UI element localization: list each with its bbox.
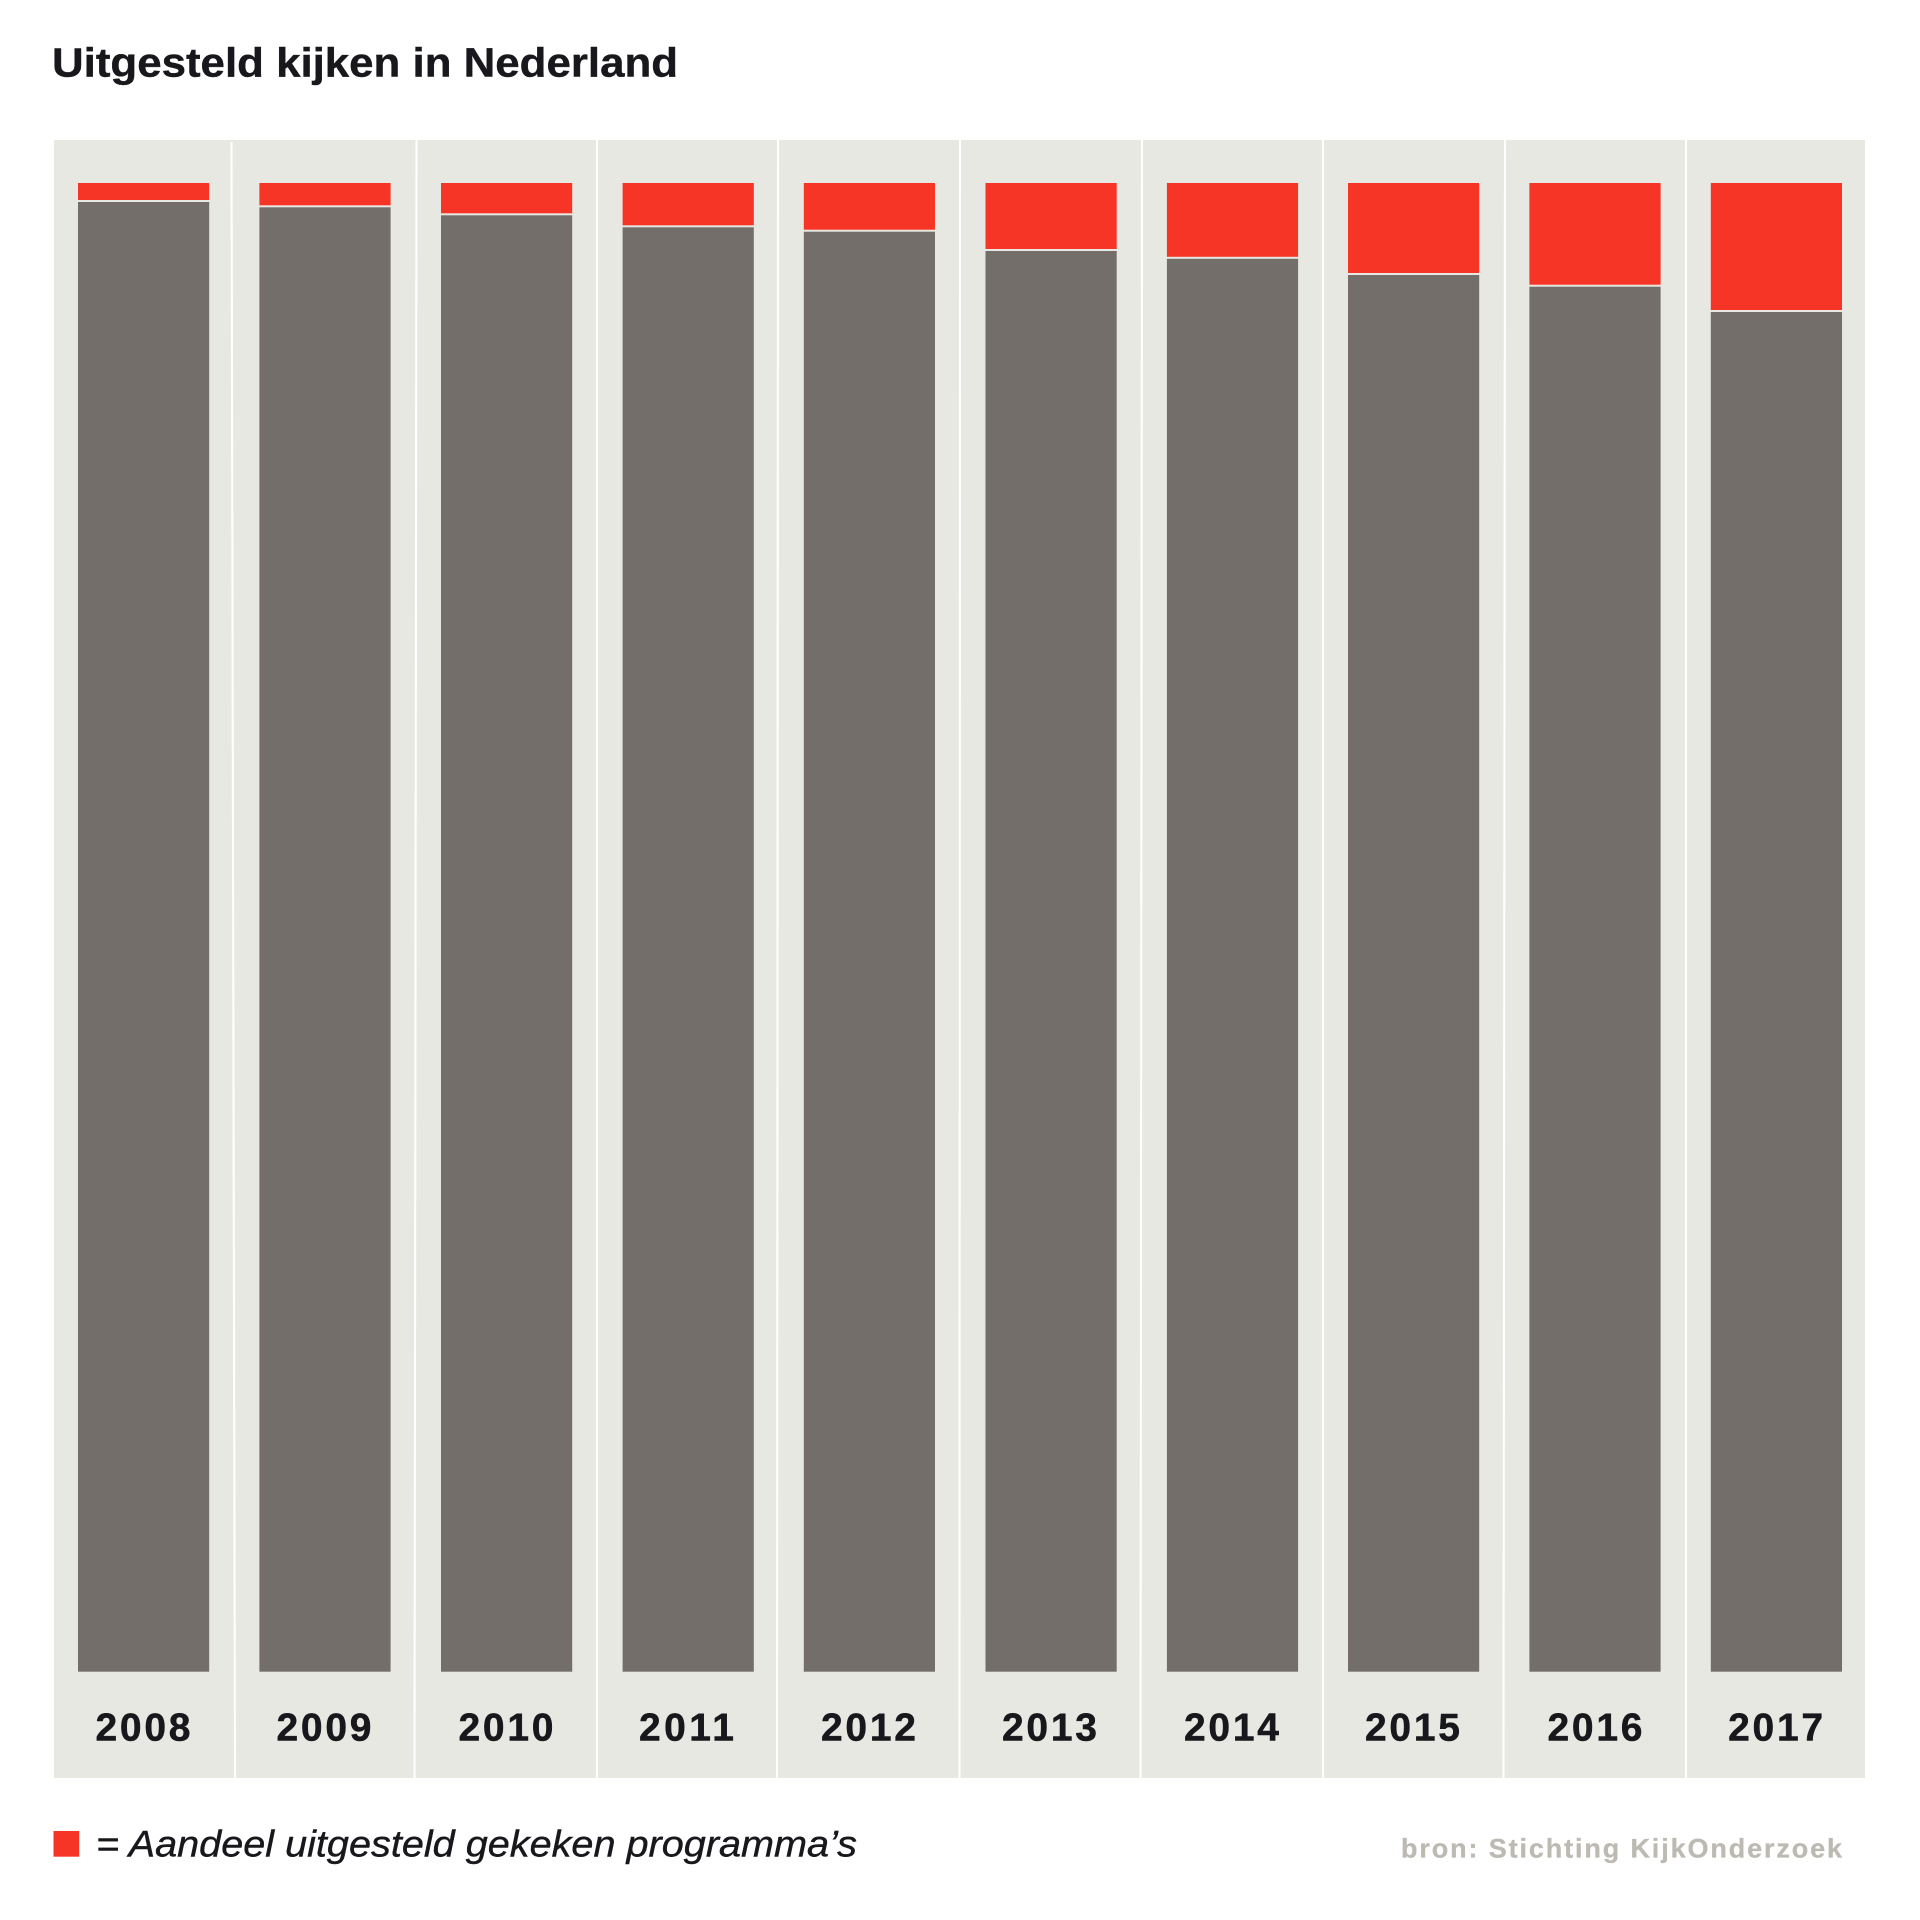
bar 2008 bbox=[78, 183, 209, 1750]
bar 2010 bbox=[441, 183, 572, 1750]
bar 2017: 2017 bbox=[1728, 1707, 1823, 1750]
legend text: = Aandeel uitgesteld gekeken programma’s bbox=[96, 1824, 857, 1865]
bar 2011: 2011 bbox=[639, 1707, 734, 1750]
bar 2017 bbox=[1711, 183, 1842, 1750]
bar 2013: 2013 bbox=[1002, 1707, 1097, 1750]
source credit: bron: Stichting KijkOnderzoek bbox=[1401, 1833, 1843, 1863]
bar 2012: 2012 bbox=[821, 1707, 916, 1750]
bar 2016: 2016 bbox=[1548, 1707, 1642, 1750]
bar 2015 bbox=[1348, 183, 1479, 1750]
bar 2015: 2015 bbox=[1365, 1707, 1460, 1750]
legend bbox=[54, 1824, 857, 1865]
bar 2008: 2008 bbox=[96, 1707, 190, 1750]
bar 2013 bbox=[986, 183, 1117, 1750]
legend swatch bbox=[54, 1831, 79, 1857]
bar 2011 bbox=[623, 183, 754, 1750]
bar 2012 bbox=[804, 183, 935, 1750]
bar 2014 bbox=[1167, 183, 1298, 1750]
bar 2009 bbox=[259, 183, 391, 1750]
title: Uitgesteld kijken in Nederland bbox=[52, 40, 678, 86]
bar 2010: 2010 bbox=[458, 1707, 554, 1750]
bar 2016 bbox=[1529, 183, 1661, 1750]
bar 2009: 2009 bbox=[276, 1707, 372, 1750]
bar 2014: 2014 bbox=[1184, 1707, 1279, 1750]
